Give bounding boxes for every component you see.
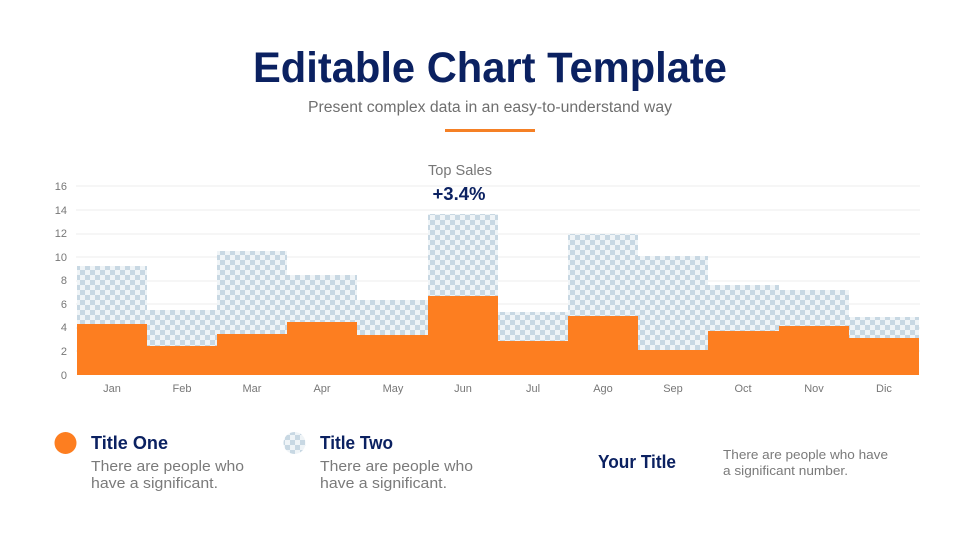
chart — [55, 163, 920, 395]
series: Title One orange bars — [77, 296, 919, 375]
callout: +3.4%: +3.4% — [432, 183, 486, 204]
legend: Title One — [54, 432, 244, 492]
chart title: Top Sales — [428, 163, 492, 179]
y axis labels: 0 — [61, 370, 67, 382]
y axis labels: 12 — [55, 228, 67, 240]
x axis labels: Ago — [593, 383, 613, 395]
x axis labels: Feb — [173, 383, 191, 395]
y axis labels: 16 — [55, 181, 67, 193]
text: Title Two description: There are people who — [320, 458, 473, 475]
y axis labels: 6 — [61, 299, 67, 311]
heading: Title One: Title One — [91, 433, 168, 453]
x axis labels: Dic — [876, 383, 892, 395]
subtitle: Present complex data in an easy-to-understand way — [308, 99, 672, 116]
x axis labels: Sep — [663, 383, 683, 395]
title accent line — [445, 129, 535, 132]
x axis labels: Nov — [804, 383, 824, 395]
x axis labels: Oct — [734, 383, 752, 395]
text: Title Two description: have a significant. — [320, 475, 447, 492]
text: Title One description: have a significant. — [91, 475, 218, 492]
text: Your Title description: a significant number. — [723, 463, 848, 478]
x axis labels: May — [383, 383, 404, 395]
x axis labels — [103, 383, 892, 395]
y axis labels: 10 — [55, 252, 67, 264]
text: Your Title description: There are people who have — [723, 447, 888, 462]
y axis labels: 8 — [61, 275, 67, 287]
x axis labels: Jun — [454, 383, 472, 395]
text: Your Title description — [723, 447, 888, 478]
x axis labels: Jul — [526, 383, 540, 395]
x axis labels: Jan — [103, 383, 121, 395]
heading: Your Title: Your Title — [598, 452, 676, 472]
x axis labels: Mar — [243, 383, 262, 395]
icon: orange circle — [54, 432, 76, 454]
icon: checkered circle — [284, 432, 306, 454]
title: Editable Chart Template — [253, 44, 727, 92]
panel: Your Title — [598, 447, 888, 478]
y axis labels: 14 — [55, 205, 67, 217]
legend: Title Two — [284, 432, 473, 492]
text: Title One description — [91, 458, 244, 492]
series: Title Two checkered bars — [77, 214, 919, 375]
x axis labels: Apr — [313, 383, 331, 395]
text: Title Two description — [320, 458, 473, 492]
y axis labels: 2 — [61, 346, 67, 358]
text: Title One description: There are people who — [91, 458, 244, 475]
y axis labels — [55, 181, 67, 382]
heading: Title Two: Title Two — [320, 433, 393, 453]
y axis labels: 4 — [61, 322, 67, 334]
